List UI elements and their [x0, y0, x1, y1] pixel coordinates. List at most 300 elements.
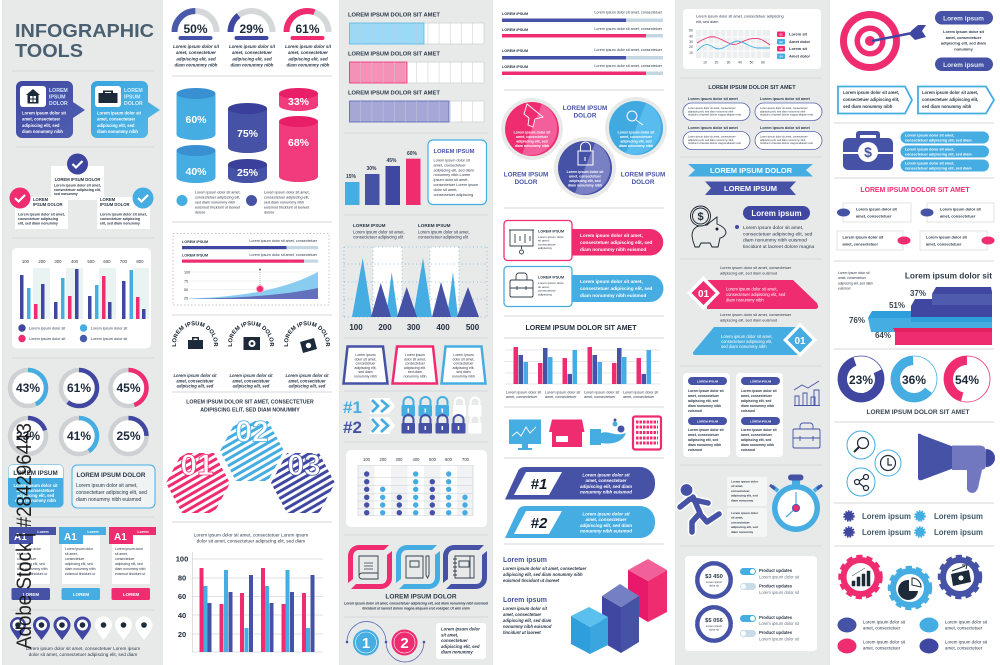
panel: dot plot: 400 [412, 457, 420, 462]
heading: column four: LOREM IPSUM DOLOR SIT AMET [526, 325, 637, 332]
staircase chart: amet, consectetuer [838, 276, 867, 280]
info cards: amet, consectetuer [741, 433, 773, 437]
banner #1: #1 [531, 476, 547, 493]
#1 #2 with chevrons [343, 398, 395, 437]
axis labels: 700 [120, 259, 128, 264]
panel: dot plot: 500 [429, 457, 437, 462]
donut values [16, 381, 141, 443]
icons: monitor, shop, hand, abacus [509, 416, 661, 450]
donuts: bottom right: 23% [849, 373, 873, 387]
chart legend: Amet dolor [789, 54, 811, 58]
trapezoid text boxes: Lorem ipsum [355, 353, 376, 357]
circles: megaphone, search, lock: diam nonummy nibh [515, 144, 549, 148]
cylinder legend [176, 190, 310, 214]
panel: A1 blue card: LOREM [73, 592, 89, 597]
callout: outlined box: consectetuer adipiscing elit, sed [76, 490, 147, 496]
panel: wave line chart: 40 [689, 34, 693, 38]
icon: growth chart [794, 381, 820, 406]
piggy text [735, 206, 815, 250]
checklist callouts: LOREM [100, 197, 116, 202]
panel: progress and area chart: LOREM IPSUM [182, 254, 208, 258]
grouped bars chart two: Lorem ipsum dolor sit [584, 390, 619, 394]
panel: progress and area chart: Lorem ipsum dolor sit amet, consectetuer [249, 253, 318, 257]
panel: house speech card: LOREM [49, 88, 68, 94]
captions under icons: amet, consectetuer [176, 378, 214, 383]
panel: product updates: Product updates [759, 584, 793, 588]
donut caption: LOREM IPSUM DOLOR SIT AMET [866, 409, 970, 416]
caption under pins: Lorem ipsum dolor sit amet, consectetuer Lorem ipsum [26, 646, 140, 651]
outlined pill list: Lorem ipsum dolor sit amet [688, 97, 739, 101]
pink presentation row: consectetuer adipiscing elit, sed [580, 240, 653, 245]
circles: megaphone, search, lock: adipiscing elit, sed [516, 140, 548, 144]
outlined pill list: adipiscing elit, sed diam nonummy nibh [688, 109, 734, 113]
grouped bars chart two: amet, consectetuer [506, 395, 538, 399]
banner #2: Lorem ipsum dolor sit [582, 512, 630, 516]
circles: megaphone, search, lock [501, 97, 667, 199]
outlined pill list: tincidunt ut laoreet dolore magna aliquam erat [688, 141, 741, 145]
hexagons striped: 02 [235, 416, 269, 448]
arrow banners: Lorem ipsum dolor sit amet, consectetuer [720, 265, 792, 270]
steps text box [436, 623, 486, 659]
gauge labels: amet, consectetuer [288, 50, 328, 55]
panel: A1 blue card: consectetuer [65, 557, 85, 561]
outlined pill list: tincidunt ut laoreet dolore magna aliquam erat [688, 113, 741, 117]
info cards: Lorem ipsum dolor sit [741, 428, 777, 432]
panel: A1 purple card: euismod tincidunt ut [17, 572, 47, 576]
circles: megaphone, search, lock: DOLOR [515, 179, 538, 186]
staircase chart: 37% [910, 289, 926, 298]
callout: lorem ipsum: ipsum dolor sit amet, [434, 178, 469, 182]
panel: A1 pink card: A1 [114, 532, 127, 543]
panel: toolbox speech card: amet, consectetuer [97, 117, 136, 122]
panel: wave line chart: Lorem ipsum dolor sit amet, consectetuer adipiscing [696, 14, 784, 18]
heading: tiles: LOREM IPSUM DOLOR [385, 594, 457, 600]
circles: megaphone, search, lock: Lorem ipsum dolor sit [514, 130, 551, 134]
runner text boxes: Lorem ipsum dolor [731, 511, 759, 515]
badge one: dolor sit [709, 584, 719, 588]
trapezoid text boxes: dolor sit amet, [355, 357, 377, 361]
icons: padlocks [402, 397, 482, 434]
info cards: diam nonummy nibh [688, 404, 721, 408]
icon: toolbox [98, 90, 118, 103]
panel: product updates: Lorem ipsum dolor sit [759, 590, 800, 595]
donuts: bottom right: 54% [955, 373, 979, 387]
arrow boxes: Lorem ipsum dolor sit amet, [922, 90, 978, 95]
text blocks beside cubes [503, 557, 587, 635]
gauge labels: adipiscing elit, sed [232, 56, 272, 61]
gauge labels: diam nonummy nibh [175, 63, 218, 68]
arrow banners: diam nonummy nibh [726, 298, 764, 302]
chart legend: 03 [779, 47, 783, 51]
runner text boxes: adipiscing elit, sed [731, 494, 758, 498]
icon: presentation [509, 230, 534, 254]
grouped bars chart two: Lorem ipsum dolor sit [506, 390, 541, 394]
outlined pill list: tincidunt ut laoreet dolore magna aliquam erat [760, 113, 813, 117]
grouped bars chart two: Lorem ipsum dolor sit [545, 390, 580, 394]
progress bars block: Lorem ipsum dolor sit amet, consectetuer [594, 10, 663, 14]
steps text box: consectetuer [441, 638, 468, 643]
panel: progress and area chart: 100 [184, 270, 190, 274]
axis labels: 500 [87, 259, 95, 264]
circles: megaphone, search, lock: diam nonummy nibh [619, 144, 653, 148]
text blocks beside cubes: amet, consectetuer [503, 612, 542, 617]
outlined pill list: Lorem ipsum dolor sit amet [688, 126, 739, 130]
icon: megaphone large [918, 434, 995, 493]
segmented bars: LOREM IPSUM DOLOR SIT AMET [348, 52, 440, 58]
grouped bar chart: 100 [176, 554, 188, 564]
captions under icons: adipiscing elit, sed [177, 384, 214, 389]
circles: megaphone, search, lock: LOREM IPSUM [621, 172, 665, 178]
info cards: adipiscing elit, sed [688, 438, 718, 442]
chart legend: 04 [779, 54, 783, 58]
info cards: Lorem ipsum dolor sit [741, 389, 777, 393]
badge one: $3 450 [705, 574, 723, 580]
text blocks beside cubes: euismod tincidunt ut laoreet [503, 578, 560, 583]
cylinders: 25% [237, 167, 259, 179]
grouped bar chart [176, 552, 323, 652]
trapezoid text boxes: consectetuer [453, 362, 474, 366]
captions under icons: Lorem ipsum dolor sit [174, 373, 217, 378]
panel: dot plot: 700 [462, 457, 470, 462]
info cards [683, 373, 783, 457]
panel: wave line chart: 60 [761, 60, 765, 64]
triangle chart: 300 [407, 323, 421, 332]
blue text pills: Lorem ipsum dolor sit amet, [905, 162, 954, 166]
panel: A1 blue card: adipiscing elit, sed [65, 562, 93, 566]
runner text boxes: diam nonummy [731, 498, 754, 502]
axis labels: 400 [71, 259, 79, 264]
grouped bars chart two: amet, consectetuer [545, 395, 577, 399]
chart caption: dolor sit amet, consectetuer adipiscing elit, sed diam [197, 538, 305, 544]
panel: A1 pink card: Lorem [137, 530, 149, 534]
info cards: LOREM IPSUM [750, 380, 772, 384]
piggy text: tincidunt ut laoreet dolore magna [743, 244, 815, 250]
circles: megaphone, search, lock: Lorem ipsum dolor sit [618, 130, 655, 134]
circles: megaphone, search, lock: amet, consectetuer [620, 135, 653, 139]
panel: wave line chart: 50 [689, 28, 693, 32]
panel: A1 purple card: Lorem [37, 530, 49, 534]
gear legend: amet, consectetuer [945, 626, 983, 630]
banner #2 [505, 506, 655, 538]
runner text boxes: consectetuer [731, 489, 751, 493]
panel: house speech card: diam nonummy nibh [22, 129, 63, 134]
icon text: dollar sign: $ [697, 211, 704, 223]
piggy text: Lorem ipsum [751, 209, 802, 218]
outlined pill list: tincidunt ut laoreet dolore magna aliquam erat [760, 141, 813, 145]
legend: Lorem ipsum dolor sit [91, 326, 128, 330]
pink presentation row: consectetuer [538, 242, 556, 246]
panel: A1 pink card: euismod tincidunt ut [115, 572, 145, 576]
grouped bar chart: 60 [178, 592, 186, 601]
panel: A1 pink card: LOREM [123, 592, 139, 597]
outlined pill list: LOREM IPSUM DOLOR SIT AMET [708, 85, 796, 91]
info cards: amet, consectetuer [688, 394, 720, 398]
arrow banners: Lorem ipsum dolor sit amet, [721, 334, 773, 339]
triangle chart text [353, 223, 470, 240]
panel: A1 pink card: Lorem ipsum dolor [115, 547, 144, 551]
panel: A1 purple card: psum dolor [24, 547, 42, 551]
gear legend [838, 618, 988, 654]
legend: Lorem ipsum dolor sit [29, 337, 66, 341]
gear legend: Lorem ipsum dolor sit [945, 620, 988, 624]
outlined pill list: adipiscing elit, sed diam nonummy nibh [760, 109, 806, 113]
caption under pins: dolor sit amet, consectetuer adipiscing elit, sed diam [29, 652, 137, 657]
trapezoid text boxes: adipiscing elit, [453, 366, 475, 370]
outlined pill list: Lorem ipsum dolor sit amet, consectetuer [760, 134, 808, 138]
runner text boxes: adipiscing elit, sed [731, 525, 758, 529]
numbered steps: 2 [400, 635, 409, 652]
icon: blue check [132, 188, 154, 208]
cylinder legend: consectetuer adipiscing elit, [195, 196, 240, 200]
panel: progress and area chart: LOREM IPSUM [182, 240, 208, 244]
axis labels [22, 259, 144, 264]
icon: runner [680, 484, 719, 532]
captions under icons: adipiscing elit, sed [289, 384, 326, 389]
arrow boxes: sed diam nonummy nibh [922, 104, 972, 109]
trapezoid text boxes [344, 346, 486, 384]
panel: A1 purple card: LOREM [23, 592, 39, 597]
staircase chart [838, 270, 992, 345]
circles: megaphone, search, lock: amet, consectetuer [569, 174, 602, 178]
panel: wave line chart: 40 [738, 60, 742, 64]
panel: dot plot [346, 450, 487, 527]
runner text boxes [727, 477, 767, 537]
panel: progress and area chart: 75 [184, 280, 188, 284]
banner #1 [505, 467, 655, 500]
panel: A1 blue card: Lorem [87, 530, 99, 534]
staircase chart: euismod [838, 287, 851, 291]
icons: map pins [10, 616, 152, 640]
donut values: 45% [116, 381, 141, 395]
icon: megaphone [524, 104, 543, 127]
info cards: LOREM IPSUM [750, 420, 772, 424]
ellipse tag boxes: Lorem ipsum dolor sit [940, 206, 982, 212]
text blocks beside cubes: tincidunt ut laoreet [503, 630, 541, 635]
gear legend: Lorem ipsum dolor sit [863, 620, 906, 624]
panel: dot plot: 600 [445, 457, 453, 462]
blue briefcase row [504, 266, 664, 306]
blue briefcase row: diam nonummy nibh euismod [580, 293, 647, 298]
steps text box: sit amet, [441, 632, 458, 637]
bar chart: rising percentages: 30% [366, 166, 377, 172]
panel: progress and area chart: 25 [184, 296, 188, 300]
captions under icons: amet, consectetuer [288, 378, 326, 383]
banner #1: amet, consectetuer [585, 478, 627, 483]
#1 #2 with chevrons: #2 [343, 418, 362, 437]
trapezoid text boxes: adipiscing elit, [355, 366, 377, 370]
pink presentation row: diam nonummy nibh euismod [580, 247, 647, 252]
trapezoid text boxes: sed diam [408, 370, 422, 374]
progress bars block: LOREM IPSUM [502, 12, 528, 16]
info cards: euismod [741, 409, 755, 413]
staircase chart: 64% [875, 331, 891, 340]
panel: A1 blue card: euismod tincidunt ut [65, 572, 95, 576]
gauge labels: adipiscing elit, sed [288, 56, 328, 61]
callout: lorem ipsum [428, 140, 486, 204]
panel: progress and area chart: Lorem ipsum dolor sit amet, consectetuer [249, 239, 318, 243]
icon: padlock [578, 142, 593, 165]
caption under pins [26, 646, 140, 657]
callout: lorem ipsum split box: diam nonummy nibh [15, 498, 56, 503]
arrow banners: adipiscing elit, sed diam euismod [720, 270, 777, 275]
circular labels: LOREM IPSUM DOLOR [172, 321, 218, 346]
panel: wave line chart: 50 [750, 60, 753, 64]
text blocks beside cubes: adipiscing elit, sed diam [503, 618, 552, 623]
gauge labels: adipiscing elit, sed [176, 56, 216, 61]
callout: lorem ipsum: dolor sit amet, [434, 188, 457, 192]
circles: megaphone, search, lock: Lorem ipsum dolor sit [567, 170, 604, 174]
hexagons striped: 01 [180, 449, 214, 482]
panel: product updates: Lorem ipsum dolor sit [759, 636, 800, 642]
pills beside target: amet, consectetuer [946, 35, 982, 40]
panel: wave line chart: 20 [689, 45, 693, 49]
icon: piggy bank [690, 206, 726, 247]
icon: purple briefcase [793, 423, 820, 448]
axis labels: 100 [22, 259, 30, 264]
gauge labels: Lorem ipsum dolor sit [285, 44, 332, 49]
info cards: euismod [688, 448, 702, 452]
blue briefcase row: Lorem ipsum dolor sit amet, [580, 279, 643, 284]
arrow banners [687, 265, 818, 357]
chart caption: Lorem ipsum dolor sit amet, consectetuer Lorem ipsum [194, 532, 308, 538]
cylinders: 40% [185, 166, 207, 178]
numbered steps: 1 [362, 635, 370, 652]
panel: toolbox speech card: adipiscing elit, sed [97, 123, 135, 128]
callout: lorem ipsum: consectetuer Lorem ipsum [434, 183, 478, 187]
info cards: euismod [741, 448, 755, 452]
progress bars block: Lorem ipsum dolor sit amet, consectetuer [594, 64, 663, 68]
panel: toolbox speech card [91, 81, 160, 138]
cylinder legend: Lorem ipsum dolor sit amet, [195, 190, 240, 194]
circles: megaphone, search, lock: LOREM IPSUM [504, 172, 548, 178]
bar chart: rising percentages [345, 151, 420, 205]
text blocks beside cubes: Lorem ipsum [503, 597, 547, 604]
staircase chart: Lorem ipsum dolor sit [905, 270, 992, 280]
blue text pills [900, 132, 989, 172]
panel: wave line chart: 20 [715, 60, 718, 64]
heading: tiles: tincidunt ut laoreet dolore magna aliquam erat volutpat. Ut wisi enim [362, 606, 470, 610]
arrow banners: 01 [794, 336, 806, 347]
#1 #2 with chevrons: #1 [343, 398, 362, 417]
badge one [694, 560, 734, 600]
title [15, 20, 154, 61]
progress bars block: Lorem ipsum dolor sit amet, consectetuer [594, 48, 663, 52]
icon: magnifier [627, 111, 643, 125]
callout: lorem ipsum: LOREM IPSUM [434, 149, 475, 155]
ellipse tag boxes: Lorem ipsum dolor sit [856, 206, 898, 212]
runner text boxes: consectetuer [731, 520, 751, 524]
progress bars block: LOREM IPSUM [502, 28, 528, 32]
text blocks beside cubes: nonummy nibh euismod [503, 624, 552, 629]
panel: toolbox speech card: LOREM [124, 88, 143, 94]
bullet list with seals: Lorem ipsum [934, 528, 983, 537]
badge two [694, 604, 734, 644]
text blocks beside cubes: Lorem ipsum [503, 557, 547, 564]
cylinder legend: consectetuer adipiscing elit, [264, 196, 309, 200]
grouped bars chart two: Lorem ipsum dolor sit [623, 390, 658, 394]
ellipse tag boxes: Lorem ipsum dolor sit [926, 234, 968, 240]
panel: progress and area chart [173, 234, 329, 305]
triangle chart: 100 [349, 323, 363, 332]
circles: megaphone, search, lock: LOREM IPSUM [563, 105, 607, 112]
heading: hexagon section [186, 400, 314, 414]
banner #2: adipiscing elit, sed diam [580, 523, 632, 528]
captions under icons: Lorem ipsum dolor sit [286, 373, 329, 378]
ellipse tag boxes [837, 203, 994, 250]
chart legend [777, 32, 811, 59]
chart legend: Lorem sit [789, 46, 808, 51]
axis labels: 600 [103, 259, 111, 264]
progress bars block: LOREM IPSUM [502, 65, 528, 69]
badge two: $5 056 [705, 618, 724, 624]
checklist callouts: consectetuer adipiscing [18, 217, 58, 221]
cylinders: 68% [288, 137, 310, 149]
info cards: Lorem ipsum dolor sit [688, 389, 724, 393]
cylinders: 60% [185, 114, 207, 126]
arrow banners: Lorem ipsum dolor sit amet, [726, 286, 778, 292]
bar chart: rising percentages: 45% [386, 158, 397, 164]
panel: dot plot: 200 [380, 457, 387, 462]
ribbons: LOREM IPSUM DOLOR [710, 166, 793, 175]
panel: product updates: Product updates [759, 568, 793, 573]
icon: stopwatch [770, 474, 822, 532]
steps text box: diam nonummy [441, 650, 473, 655]
heading: hexagon section: LOREM IPSUM DOLOR SIT AMET, CONSECTETUER [186, 400, 314, 406]
checklist callouts: IPSUM DOLOR [100, 202, 130, 207]
checklist callouts [10, 154, 154, 229]
pink presentation row: adipiscing [538, 246, 552, 250]
runner text boxes: sit amet, [731, 516, 743, 520]
trapezoid text boxes: nonummy nibh [354, 374, 377, 378]
blue text pills: consectetuer adipiscing elit, sed diam [905, 153, 972, 157]
icon: money briefcase [843, 131, 893, 170]
callout: lorem ipsum: Lorem ipsum dolor sit [434, 158, 471, 162]
blue text pills: consectetuer adipiscing elit, sed diam [905, 139, 972, 143]
panel: product updates: Lorem ipsum dolor sit [759, 621, 800, 626]
triangle chart text: consectetuer adipiscing elit [418, 234, 469, 240]
cylinders: 33% [288, 96, 310, 108]
blue briefcase row: Lorem ipsum dolor [538, 281, 564, 285]
callout: outlined box: Lorem ipsum dolor sit amet, [76, 483, 138, 489]
panel: product updates: Product updates [759, 630, 793, 635]
cylinder legend: sed diam nonummy nibh [264, 200, 304, 204]
outlined pill list: Lorem ipsum dolor sit amet [760, 126, 811, 130]
legend [18, 324, 128, 342]
captions under icons: adipiscing elit, sed [233, 384, 270, 389]
panel: A1 blue card [59, 527, 106, 600]
triangle chart [344, 247, 487, 332]
checklist callouts: elit, sed diam nonummy [18, 222, 58, 226]
chart legend: 02 [779, 40, 783, 44]
cylinder legend: euismod tincidunt ut laoreet [264, 206, 309, 210]
pink presentation row: Lorem ipsum dolor [538, 235, 564, 239]
grouped bars chart two: amet, consectetuer [623, 395, 655, 399]
pink presentation row [504, 220, 663, 260]
isometric cubes [571, 559, 667, 654]
triangle chart text: LOREM IPSUM [353, 223, 386, 228]
info cards: Lorem ipsum dolor sit [688, 428, 724, 432]
panel: house speech card: adipiscing elit, sed [22, 123, 60, 128]
checklist callouts: IPSUM DOLOR [33, 202, 63, 207]
cylinder legend: dolore [264, 210, 274, 214]
arrow boxes: sed diam nonummy nibh [843, 104, 893, 109]
blue briefcase row: consectetuer adipiscing elit, sed [580, 286, 653, 291]
circles: megaphone, search, lock: diam nonummy nibh [568, 184, 602, 188]
banner #1: Lorem ipsum dolor sit [582, 472, 630, 478]
panel: toolbox speech card: DOLOR [124, 101, 143, 107]
panel: house speech card [16, 81, 85, 138]
progress bars block: Lorem ipsum dolor sit amet, consectetuer [594, 27, 663, 31]
